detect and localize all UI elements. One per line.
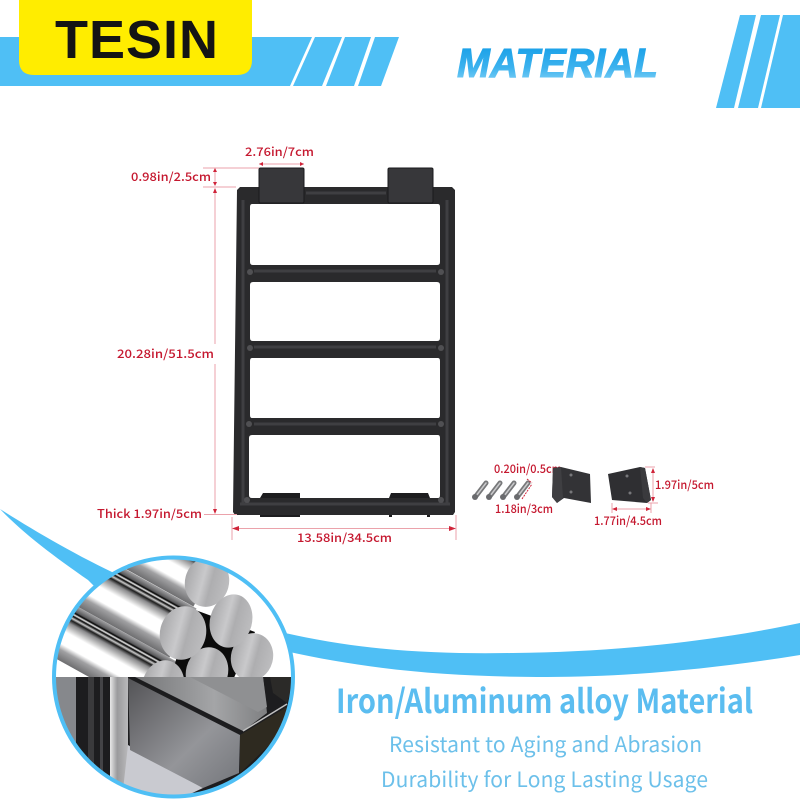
dimension: total height: 20.28in/51.5cm <box>117 345 214 362</box>
dimension: bolt sizes: 1.18in/3cm <box>495 500 553 517</box>
dimension: total width <box>232 515 456 546</box>
icon: left mounting plate <box>552 467 591 503</box>
blue wave: left tail <box>0 509 114 592</box>
photo ring <box>54 558 293 796</box>
photo: aluminium profile <box>56 677 291 794</box>
text block: material title: Iron/Aluminum alloy Material <box>336 675 753 723</box>
dimension: plate sizes <box>594 467 714 529</box>
dimension: hook height: 0.98in/2.5cm <box>131 168 211 185</box>
dimension: plate sizes: 1.97in/5cm <box>655 476 714 493</box>
dimension: hook height <box>131 168 259 187</box>
dimension: total width: 13.58in/34.5cm <box>297 529 392 546</box>
dimension: bolt sizes: 0.20in/0.5cm <box>494 460 562 477</box>
heading: MATERIAL: MATERIAL <box>457 40 658 86</box>
photo: steel rods <box>57 560 274 677</box>
header band <box>0 37 399 86</box>
icon: mounting bolts <box>472 483 528 500</box>
dimension: bracket width <box>245 143 314 166</box>
dimension: total height <box>117 188 217 514</box>
icon: right mounting plate <box>608 467 651 503</box>
logo badge <box>19 0 252 75</box>
product: ladder frame <box>233 168 455 517</box>
text block: aging resistance: Resistant to Aging and Abrasion <box>389 729 702 759</box>
dimension: bolt sizes <box>494 460 562 517</box>
dimension: thickness: Thick 1.97in/5cm <box>97 505 202 522</box>
material photo circle <box>52 556 295 798</box>
dimension: plate sizes: 1.77in/4.5cm <box>594 512 662 529</box>
logo text: TESIN <box>55 10 218 70</box>
dimension: bracket width: 2.76in/7cm <box>245 143 314 160</box>
text block: durability: Durability for Long Lasting Usage <box>381 764 708 794</box>
right corner stripes <box>716 15 800 108</box>
bottom tabs <box>260 493 430 517</box>
top hook brackets <box>259 168 433 203</box>
blue wave: right band <box>285 623 800 677</box>
